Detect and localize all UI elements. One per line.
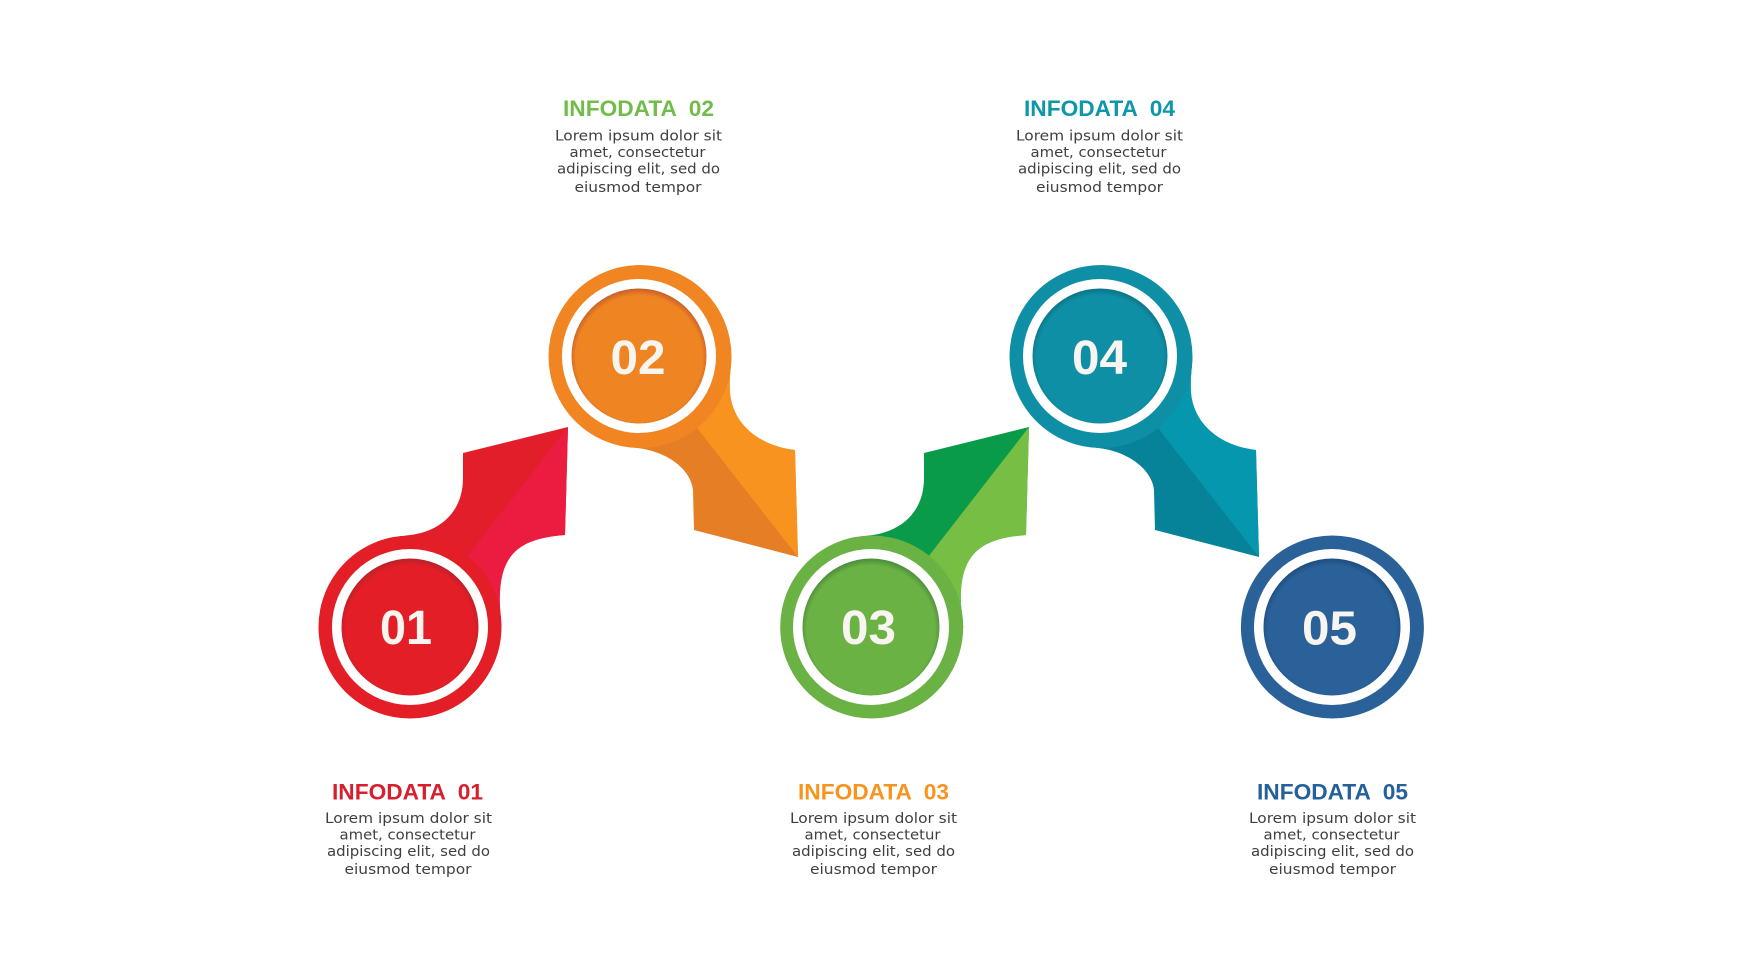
text block: infodata 05: adipiscing elit, sed do (1251, 844, 1414, 860)
circle badge 02 (548, 265, 732, 448)
step 05: blue marker: 05 (1302, 602, 1357, 656)
text block: infodata 03 (790, 780, 957, 878)
text block: infodata 01: INFODATA 01 (332, 780, 483, 804)
circle badge 01 (318, 536, 502, 718)
text block: infodata 04: adipiscing elit, sed do (1018, 162, 1181, 178)
text block: infodata 01: adipiscing elit, sed do (327, 844, 490, 860)
arrow 01 (405, 427, 568, 627)
circle badge 01: 01 (380, 602, 432, 655)
text block: infodata 03: Lorem ipsum dolor sit (790, 811, 957, 827)
circle badge 03 (780, 536, 963, 718)
text block: infodata 02: INFODATA 02 (563, 96, 714, 121)
text block: infodata 02: eiusmod tempor (574, 180, 702, 196)
text block: infodata 01: Lorem ipsum dolor sit (325, 811, 492, 827)
text block: infodata 05: eiusmod tempor (1269, 862, 1396, 878)
text block: infodata 05: Lorem ipsum dolor sit (1249, 811, 1416, 827)
text block: infodata 05: INFODATA 05 (1257, 780, 1408, 804)
step 01: red marker with arrow (318, 427, 568, 718)
text block: infodata 01: eiusmod tempor (344, 862, 472, 878)
arrow 02 (635, 356, 798, 557)
text block: infodata 03: eiusmod tempor (810, 862, 937, 878)
step 04: teal marker with arrow (1010, 265, 1259, 557)
arrow 03 (867, 427, 1029, 627)
text block: infodata 02: adipiscing elit, sed do (557, 162, 720, 178)
text block: infodata 03: INFODATA 03 (798, 780, 949, 804)
text block: infodata 04: Lorem ipsum dolor sit (1016, 128, 1183, 144)
step 02: orange marker with arrow (548, 265, 798, 557)
text block: infodata 04: amet, consectetur (1030, 145, 1167, 161)
text block: infodata 04: INFODATA 04 (1024, 96, 1176, 121)
text block: infodata 02: Lorem ipsum dolor sit (555, 128, 722, 144)
step 03: green marker with arrow (780, 427, 1029, 718)
text block: infodata 01: amet, consectetur (340, 828, 476, 844)
text block: infodata 02: amet, consectetur (570, 145, 706, 161)
step 05: blue marker (1241, 536, 1424, 718)
circle badge 04: 04 (1072, 332, 1127, 385)
circle badge 03: 03 (841, 602, 896, 655)
text block: infodata 02 (555, 96, 722, 196)
text block: infodata 03: amet, consectetur (804, 828, 941, 844)
text block: infodata 04 (1016, 96, 1183, 196)
text block: infodata 05 (1249, 780, 1416, 878)
text block: infodata 05: amet, consectetur (1264, 828, 1400, 844)
circle badge 04 (1010, 265, 1192, 448)
text block: infodata 04: eiusmod tempor (1036, 180, 1163, 196)
text block: infodata 03: adipiscing elit, sed do (792, 844, 955, 860)
circle badge 02: 02 (610, 332, 666, 385)
text block: infodata 01 (325, 780, 492, 878)
arrow 04 (1096, 356, 1259, 557)
